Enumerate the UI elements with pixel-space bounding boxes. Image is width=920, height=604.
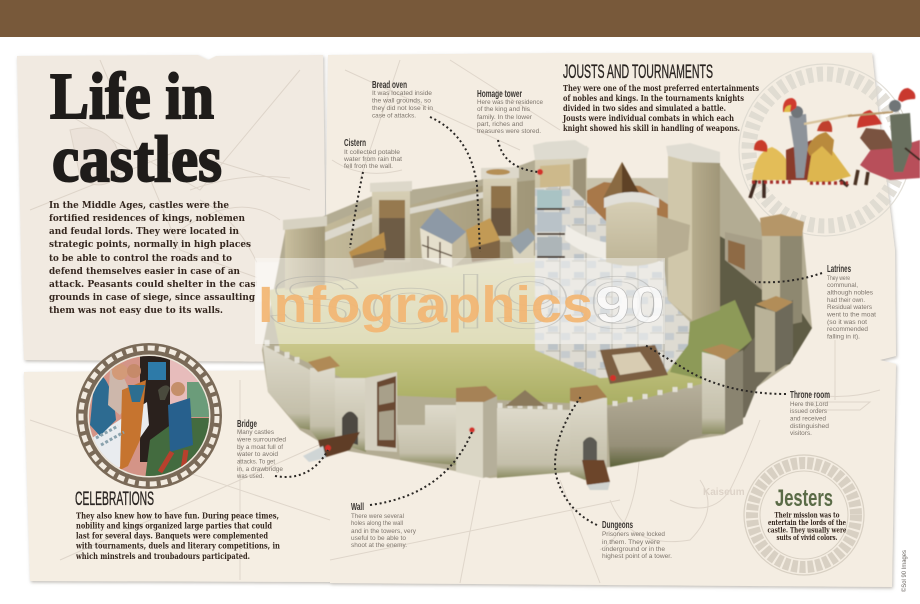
dotted leader: latrines <box>755 273 822 282</box>
intro text block <box>49 200 269 316</box>
callout: jesters: castle. They usually were <box>768 526 847 534</box>
heading: jousts and tournaments: JOUSTS AND TOURNAMENTS <box>563 62 713 83</box>
intro text block: fortified residences of kings, noblemen <box>49 213 245 224</box>
label: cistern: fell from the wall. <box>344 163 393 170</box>
conical roof <box>603 162 642 198</box>
label: wall: and in the towers, very <box>351 528 417 535</box>
label: throne room: visitors. <box>790 430 812 437</box>
label: homage tower: of the king and his <box>477 106 531 113</box>
label: bread oven: the wall grounds, so <box>372 98 431 104</box>
left knight and horse <box>750 98 852 198</box>
dotted leader: dungeons <box>555 395 597 525</box>
keep thatched roof <box>568 182 695 245</box>
label: bread oven: It was located inside <box>372 90 432 97</box>
label: dungeons <box>602 520 672 560</box>
drawbridge front <box>582 460 610 485</box>
callout: jesters: Jesters <box>775 485 833 512</box>
callout: jesters <box>768 485 847 542</box>
intro text block: In the Middle Ages, castles were the <box>49 200 229 211</box>
intro text block: to be able to control the roads and to <box>49 253 233 264</box>
callout: jesters: entertain the lords of the <box>768 518 846 527</box>
label: bridge: in, a drawbridge <box>237 466 283 473</box>
label: throne room: Here the Lord <box>790 401 828 408</box>
castle mound <box>262 160 812 478</box>
watermark: Infographics <box>258 276 593 333</box>
right keep tower <box>668 150 720 322</box>
dotted leader: bridge <box>275 450 328 477</box>
throne room <box>600 345 668 384</box>
right knight and horse <box>848 88 920 185</box>
front wall left <box>263 345 310 430</box>
label: homage tower: part, riches and <box>477 121 523 128</box>
label: bridge: Many castles <box>237 429 275 436</box>
medallion rope frame <box>76 343 222 489</box>
back wall walkway <box>290 192 483 254</box>
dotted leader: throne room <box>645 345 786 394</box>
back battlement <box>587 178 668 205</box>
label: bread oven: Bread oven <box>372 80 407 91</box>
back wall <box>290 180 535 290</box>
courtyard buildings <box>349 208 536 268</box>
left keep tower <box>535 146 587 240</box>
text: celebrations <box>75 510 280 561</box>
crenellations <box>267 340 705 410</box>
watermark: Sol90 <box>264 261 660 344</box>
label: latrines: (so it was not <box>827 319 867 326</box>
front tower left <box>310 368 335 440</box>
red markers <box>325 169 616 451</box>
knights jousting <box>750 88 920 198</box>
text: celebrations: nobility and kings organized large parties that could <box>76 520 272 530</box>
pale halo behind watermark <box>256 262 290 302</box>
label: cistern <box>343 138 402 170</box>
label: bread oven: case of attacks. <box>372 112 416 120</box>
courtyard <box>268 255 745 405</box>
text: celebrations: which minstrels and troubadours participated. <box>75 551 250 561</box>
faint map place name: Kaiseum <box>703 487 745 498</box>
front wall right <box>607 380 717 467</box>
intro text block: grounds in case of siege, since assaulting <box>49 292 255 303</box>
label: bridge: Bridge <box>237 419 257 430</box>
far right tower <box>725 214 804 328</box>
label: dungeons: underground or in the <box>602 546 665 553</box>
label: cistern: water from rain that <box>343 156 402 163</box>
text: jousts and tournaments: of nobles and kings. In the tournaments knights <box>563 93 744 103</box>
heading: celebrations: CELEBRATIONS <box>75 489 154 510</box>
label: bridge: by a moat full of <box>237 444 283 451</box>
jesters wreath <box>744 455 864 575</box>
castle illustration <box>256 140 812 490</box>
label: bread oven <box>372 80 433 120</box>
back left towers <box>283 167 519 290</box>
intro text block: strategic points, normally in high places <box>49 239 251 250</box>
right slope <box>690 235 812 372</box>
label: throne room <box>790 390 830 437</box>
round tower <box>606 194 657 266</box>
label: latrines: recommended <box>827 326 868 333</box>
label: latrines: They were <box>827 275 850 282</box>
label: wall: useful to be able to <box>351 535 406 542</box>
text: jousts and tournaments: knight showed his skill in handling of weapons. <box>563 123 740 133</box>
illustrated banquet medallion <box>76 343 222 489</box>
label: homage tower: Here was the residence <box>477 99 543 106</box>
text: celebrations: last for several days. Banquets were complemented <box>76 530 268 540</box>
label: homage tower: treasures were stored. <box>477 128 541 135</box>
label: bread oven: they did not lose it in <box>372 105 433 112</box>
label: bridge: was used. <box>236 473 264 480</box>
label: throne room: Throne room <box>790 390 830 401</box>
label: latrines: although nobles <box>827 290 874 296</box>
label: throne room: distinguished <box>790 423 829 430</box>
top brown band <box>0 0 920 37</box>
drawbridge left <box>318 432 360 458</box>
label: bridge: attacks. To get <box>237 458 275 466</box>
tent behind wall <box>505 390 545 406</box>
callout: jesters: suits of vivid colors. <box>776 533 838 542</box>
text: jousts and tournaments: Jousts were individual combats in which each <box>562 113 734 123</box>
cutaway interior <box>535 186 690 378</box>
jousting wreath <box>739 64 911 236</box>
intro text block: defend themselves easier in case of an <box>49 266 240 277</box>
label: homage tower: Homage tower <box>477 89 522 100</box>
label: cistern: Cistern <box>344 138 366 149</box>
label: wall <box>351 502 417 549</box>
callout: jesters: Their mission was to <box>774 510 840 520</box>
tower rear right <box>755 306 775 372</box>
dotted leader: wall <box>370 432 472 505</box>
label: wall: There were several <box>351 513 405 520</box>
label: wall: shoot at the enemy. <box>351 542 407 549</box>
cutaway tower <box>365 372 397 452</box>
gatehouse <box>335 378 366 452</box>
text: celebrations: They also knew how to have fun. During peace times, <box>76 510 279 520</box>
label: dungeons: highest point of a tower. <box>602 553 672 560</box>
text: jousts and tournaments: divided in two sides and simulated a battle. <box>563 103 726 113</box>
image credit: ©Sol 90 Images <box>900 549 908 592</box>
tower right wall <box>702 352 725 434</box>
label: latrines: Residual waters <box>827 304 873 311</box>
title <box>50 60 222 196</box>
text: jousts and tournaments: They were one of the most preferred entertainments <box>563 83 759 93</box>
label: bridge: were surrounded <box>236 436 286 444</box>
left knight armour <box>789 114 808 178</box>
label: homage tower: family. In the lower <box>477 114 533 121</box>
watermark: 90 <box>595 276 665 333</box>
title: Life in <box>50 60 214 133</box>
label: latrines: communal, <box>827 282 858 289</box>
label: throne room: issued orders <box>790 408 828 415</box>
label: cistern: It collected potable <box>344 149 400 156</box>
dotted leader: bread oven <box>430 117 480 252</box>
label: latrines: falling in it). <box>827 334 860 340</box>
text: jousts and tournaments <box>562 83 759 133</box>
intro text block: attack. Peasants could shelter in the castle <box>49 279 269 290</box>
label: bridge: water to avoid <box>236 451 278 458</box>
label: wall: Wall <box>351 502 364 513</box>
dotted leader: cistern <box>350 172 363 248</box>
front tower B <box>456 398 483 478</box>
label: dungeons: Dungeons <box>602 520 633 531</box>
label: homage tower <box>477 89 543 135</box>
label: latrines: Latrines <box>827 264 851 275</box>
gate tower <box>570 398 607 480</box>
watermark <box>255 258 665 344</box>
intro text block: them was not easy due to its walls. <box>49 305 223 316</box>
dotted leader: homage tower <box>498 140 538 172</box>
label: dungeons: Prisoners were locked <box>602 531 665 538</box>
label: bridge <box>236 419 286 480</box>
label: wall: holes along the wall <box>351 520 403 527</box>
label: latrines: went to the moat <box>826 312 876 318</box>
label: dungeons: in them. They were <box>602 539 660 546</box>
text: celebrations: with tournaments, duels and literary competitions, in <box>75 540 280 550</box>
label: latrines: had their own. <box>827 297 865 304</box>
label: latrines <box>826 264 876 340</box>
central keep <box>533 140 720 384</box>
title: castles <box>52 123 222 196</box>
label: throne room: and received <box>790 416 826 422</box>
intro text block: and feudal lords. They were located in <box>49 226 239 237</box>
